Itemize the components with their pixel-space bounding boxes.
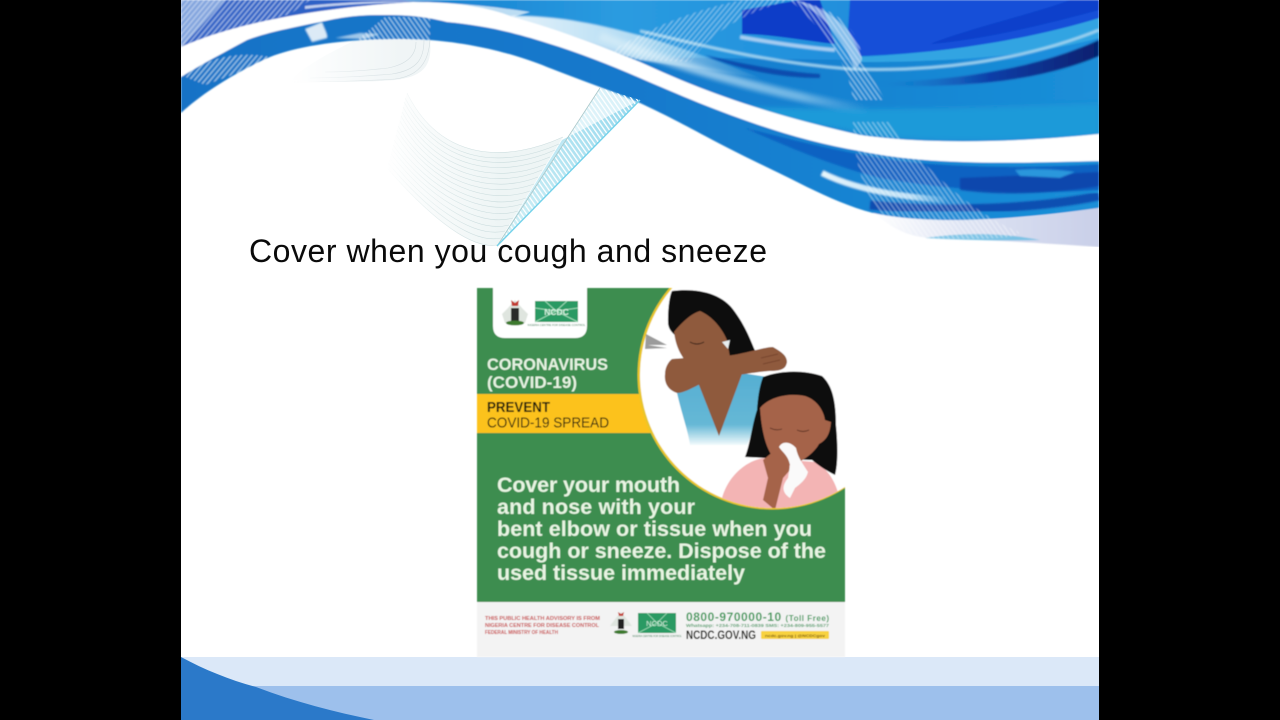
footer NCDC logo: NCDC: [646, 619, 668, 628]
logo tab: [493, 288, 587, 338]
footer phone number: 0800-970000-10 (Toll Free): [686, 610, 829, 624]
arm and hand: [763, 450, 790, 510]
poster: white illustration circle: [639, 287, 846, 509]
poster: green panel: [477, 288, 845, 602]
forearm: [665, 347, 787, 393]
stripe: upper white band joined to the main bright stripe: [181, 2, 1099, 163]
footer strip: [477, 602, 845, 657]
heading: coronavirus: CORONAVIRUS: [487, 356, 608, 374]
footer advisory text: THIS PUBLIC HEALTH ADVISORY IS FROM: [485, 616, 600, 622]
heading: coronavirus: (COVID-19): [487, 374, 577, 392]
lavender ribbon tail: [873, 208, 1099, 247]
slide background: [181, 0, 1099, 720]
stripe: soft light ribbons: [640, 30, 1099, 70]
body text: used tissue immediately: [497, 561, 745, 585]
face and neck: [674, 311, 742, 436]
body text: cough or sneeze. Dispose of the: [497, 539, 826, 563]
hair over ear: [722, 340, 730, 349]
NCDC logo: NCDC: [544, 307, 569, 317]
lower right bands: [745, 128, 1099, 192]
footer advisory text: FEDERAL MINISTRY OF HEALTH: [485, 630, 558, 636]
faint mesh blob under the band: [290, 20, 430, 82]
NCDC logo: NIGERIA CENTRE FOR DISEASE CONTROL: [528, 323, 586, 327]
bottom band: mid blue: [181, 686, 1099, 720]
mesh ribbons overlay: [600, 0, 790, 62]
NCDC logo: [528, 301, 586, 327]
stripe: pale ribbon over the white band: [510, 16, 760, 78]
footer coat of arms: [610, 612, 632, 634]
illustration: coughing woman: [665, 290, 787, 445]
heading: prevent: COVID-19 SPREAD: [487, 414, 609, 432]
pink top: [720, 458, 842, 510]
poster: white base: [477, 288, 845, 657]
footer NCDC logo: [632, 613, 682, 638]
body text: bent elbow or tissue when you: [497, 517, 812, 541]
title: Cover when you cough and sneeze: [249, 233, 767, 269]
central mesh wave: [387, 93, 563, 245]
hair: [745, 372, 837, 475]
heading: prevent: PREVENT: [487, 399, 550, 416]
shirt: [677, 372, 768, 445]
closed eye: [690, 342, 704, 344]
icon: cough lines: [645, 334, 667, 349]
footer website: NCDC.GOV.NG: [686, 630, 756, 642]
body text: Cover your mouth: [497, 473, 680, 497]
footer whatsapp line: Whatsapp: +234-708-711-0839 SMS: +234-809-955-5577: [686, 623, 830, 628]
poster: yellow circle rim: [636, 287, 846, 510]
footer NCDC logo: NIGERIA CENTRE FOR DISEASE CONTROL: [632, 635, 682, 638]
poster: yellow band: [477, 394, 667, 433]
body text: [497, 473, 826, 585]
icon: coat of arms: [502, 300, 528, 325]
illustration: woman with tissue: [720, 372, 842, 510]
tissue: [779, 443, 808, 498]
top blue wave banner: [181, 0, 1099, 247]
body text: and nose with your: [497, 495, 696, 519]
stripe: band highlight: [305, 1, 530, 17]
cyan mesh wedge: [497, 88, 640, 246]
slide canvas: [181, 0, 1099, 720]
bottom band: light: [181, 657, 1099, 686]
hair: [668, 290, 758, 362]
footer advisory text: NIGERIA CENTRE FOR DISEASE CONTROL: [485, 623, 600, 629]
footer social pill: [761, 631, 829, 639]
poster: [476, 287, 846, 656]
footer social pill: ncdc.gov.ng | @NCDCgov: [765, 633, 826, 638]
face: [760, 395, 831, 466]
bottom left blue corner: [181, 657, 374, 720]
